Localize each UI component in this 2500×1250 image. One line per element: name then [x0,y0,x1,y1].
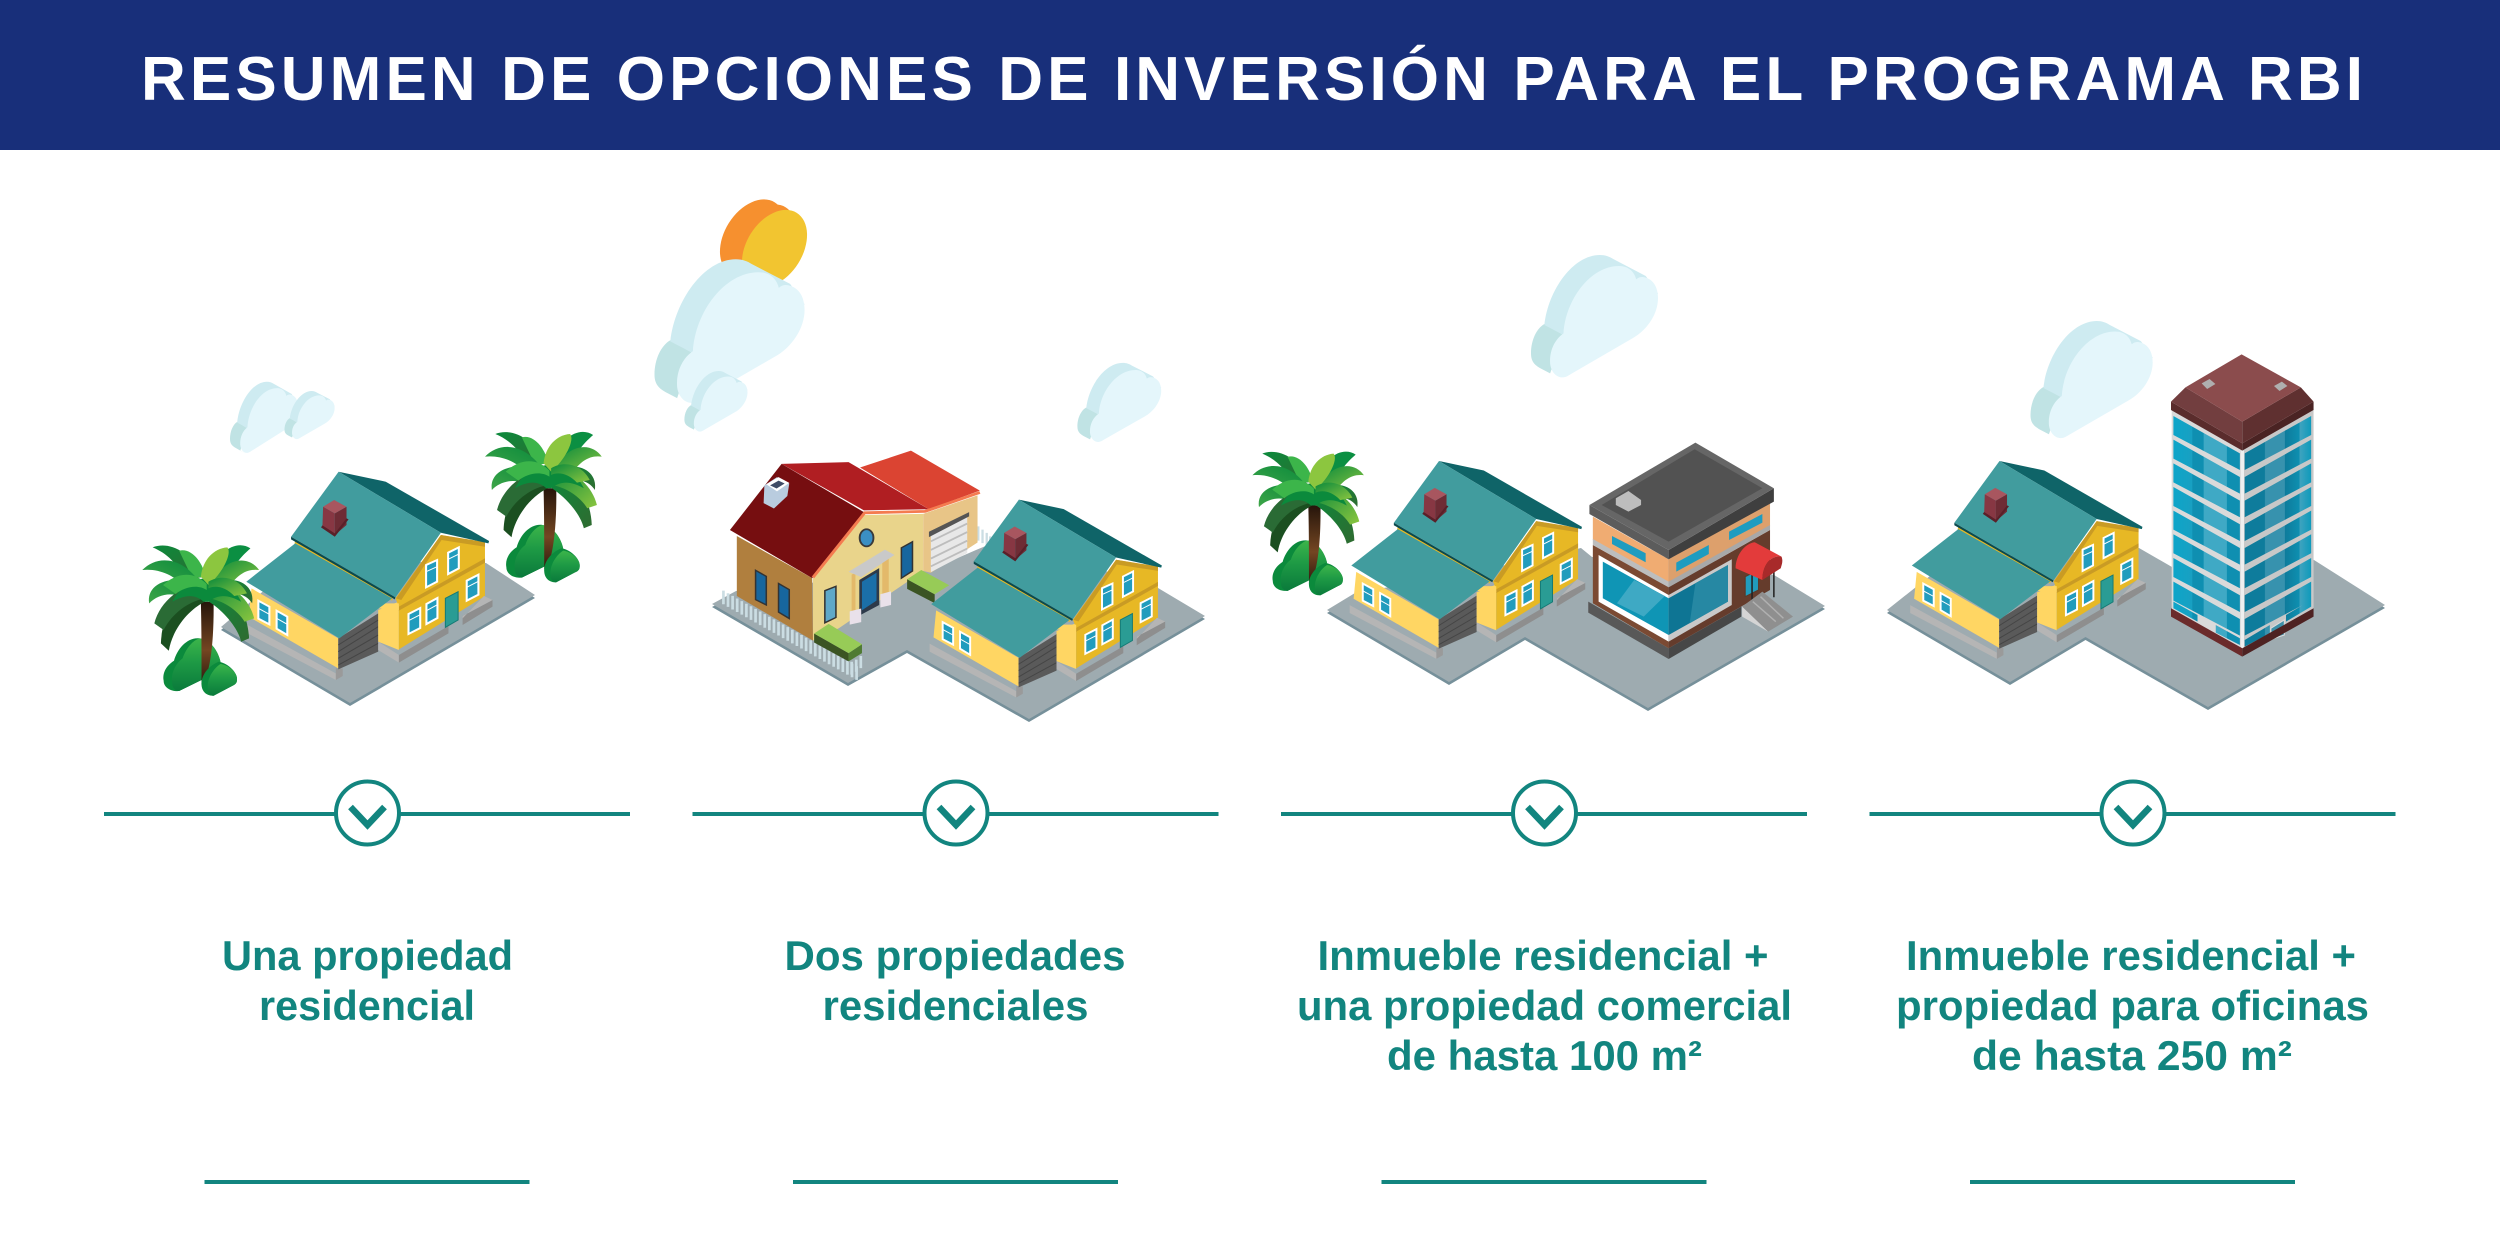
label [1297,932,1792,1079]
bottom rule [1970,1180,2295,1184]
panel 4: inmueble residencial + oficinas [1870,321,2396,1182]
illustration: ground plate [1327,548,1825,711]
header band [0,0,2500,150]
illustration: suburban house with garage [723,451,990,680]
label: propiedad para oficinas [1896,982,2369,1029]
illustration: palm right [485,432,602,582]
illustration: sun [706,188,821,299]
divider with chevron icon [692,782,1218,844]
illustration: ground plate [1887,542,2385,710]
label: Dos propiedades [784,932,1126,979]
illustration: office tower [2171,354,2314,657]
panel 1: una propiedad residencial [104,382,630,1182]
label [784,932,1126,1029]
label: residencial [259,982,475,1029]
panel 3: inmueble residencial + propiedad comercial [1252,255,1825,1182]
illustration: cloud [1531,255,1658,379]
label: Inmueble residencial + [1906,932,2356,979]
illustration: commercial shop [1588,443,1793,659]
label: residenciales [822,982,1088,1029]
label: Una propiedad [222,932,513,979]
illustration: palm left [142,545,259,696]
illustration: clouds [654,259,1161,443]
divider with chevron icon [1870,782,2396,844]
panel 2: dos propiedades residenciales [654,188,1218,1182]
label: Inmueble residencial + [1318,932,1768,979]
illustration: palm [1252,452,1364,595]
illustration: ground plate [221,560,535,706]
bottom rule [793,1180,1118,1184]
illustration: house [1350,461,1585,659]
illustration: clouds over house [230,382,335,454]
illustration: ground plate [712,540,1205,722]
label: de hasta 250 m² [1972,1032,2292,1079]
label: de hasta 100 m² [1387,1032,1702,1079]
divider with chevron icon [104,782,630,844]
illustration: cloud [2030,321,2153,440]
label: una propiedad comercial [1297,982,1792,1029]
divider with chevron icon [1281,782,1807,844]
illustration: house [1910,461,2146,659]
title: RESUMEN DE OPCIONES DE INVERSIÓN PARA EL PROGRAMA RBI [141,45,2363,114]
bottom rule [1382,1180,1706,1184]
bottom rule [204,1180,530,1184]
illustration: house [930,500,1165,697]
label [222,932,513,1029]
label [1896,932,2369,1079]
illustration: house [245,472,493,680]
